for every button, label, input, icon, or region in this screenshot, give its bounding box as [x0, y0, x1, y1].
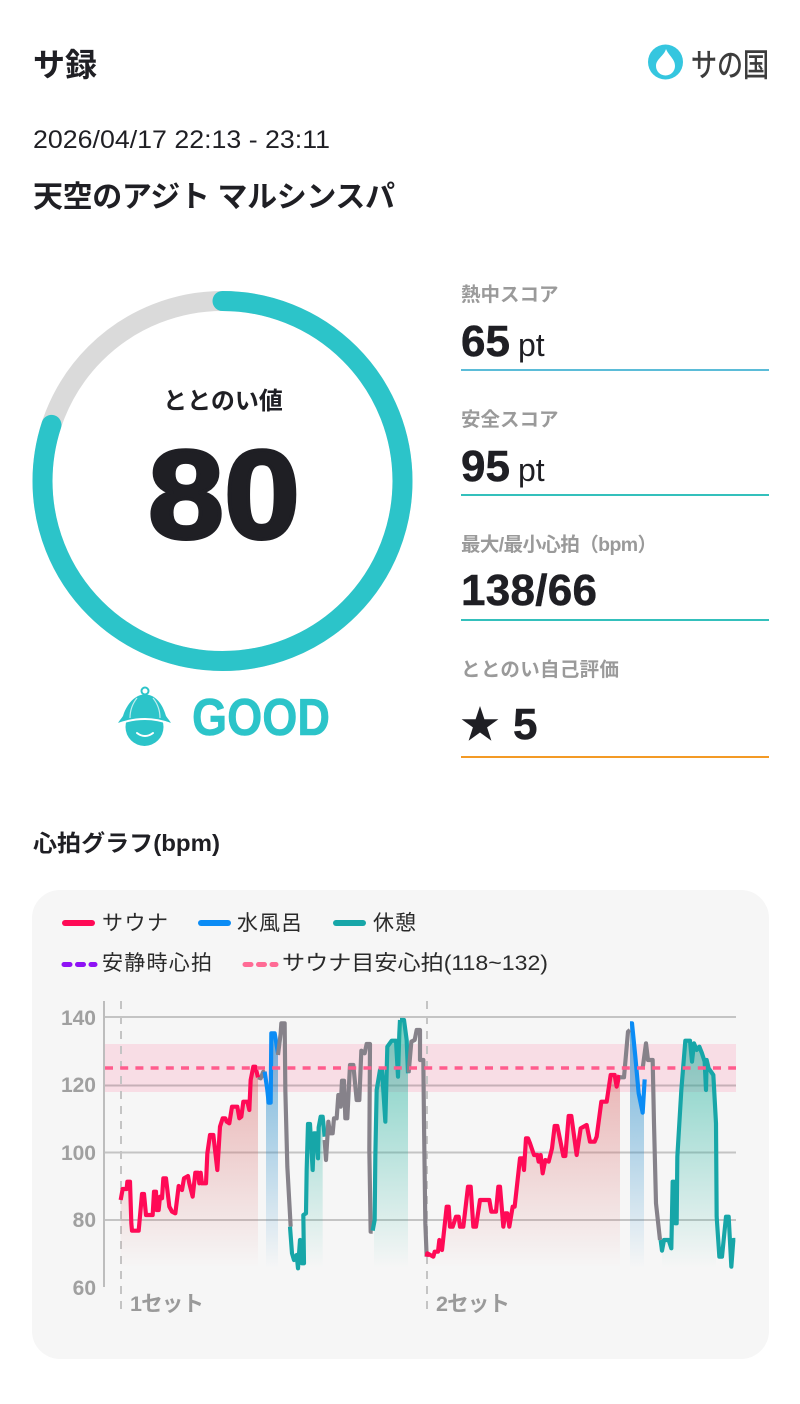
- legend: 休憩: [373, 912, 416, 935]
- stat: 安全スコア: 安全スコア: [461, 409, 559, 431]
- set labels: [130, 1292, 510, 1316]
- ring value: 80: [148, 424, 300, 565]
- stat: 最大/最小心拍: 138/66: [461, 566, 597, 615]
- stat: 熱中スコア: 熱中スコア: [461, 284, 559, 306]
- set labels: 2セット: [436, 1292, 510, 1316]
- stat: 最大/最小心拍: [461, 534, 769, 621]
- rating word: GOOD: [192, 689, 330, 747]
- legend: 水風呂: [237, 912, 302, 935]
- stat: ととのい自己評価: 5: [513, 700, 537, 749]
- target heart-rate dashed line: [105, 1066, 736, 1070]
- rating: GOOD: [118, 688, 330, 747]
- legend: サウナ: [102, 912, 168, 935]
- stat: 熱中スコア: 65: [461, 317, 510, 366]
- facility name: 天空のアジト マルシンスパ: [33, 181, 395, 214]
- y axis labels: 140: [61, 1007, 96, 1030]
- line chart: set 1: [121, 1020, 400, 1270]
- chart heading: 心拍グラフ(bpm): [33, 830, 220, 856]
- icon: sauna hat face: [118, 688, 171, 746]
- grid and axes: [103, 1001, 736, 1312]
- title: サ録: [33, 47, 97, 83]
- stat: 安全スコア: 95: [461, 442, 510, 491]
- panel: heart rate chart: [32, 890, 769, 1359]
- stat: ととのい自己評価: ととのい自己評価: [461, 659, 619, 681]
- line chart: set 2: [400, 1020, 735, 1270]
- legend: 安静時心拍: [102, 952, 212, 975]
- icon: water drop: [648, 44, 683, 80]
- stat: 熱中スコア: [461, 284, 769, 371]
- ring label: ととのい値: [163, 388, 283, 415]
- date and time: 2026/04/17 22:13 - 23:11: [33, 126, 330, 154]
- stat: 安全スコア: [461, 409, 769, 496]
- y axis labels: 100: [61, 1142, 96, 1165]
- y axis labels: [61, 1007, 96, 1300]
- stat: ととのい自己評価: [461, 659, 769, 758]
- y axis labels: 80: [73, 1209, 96, 1232]
- score ring: [42, 301, 402, 661]
- set labels: 1セット: [130, 1292, 204, 1316]
- logo wordmark: サの国: [691, 47, 769, 83]
- stat: 最大/最小心拍: 最大/最小心拍（bpm）: [461, 534, 657, 556]
- stat: 安全スコア: pt: [518, 452, 545, 488]
- target heart-rate band: [105, 1044, 736, 1092]
- stat: 熱中スコア: pt: [518, 327, 545, 363]
- legend: サウナ目安心拍(118~132): [282, 952, 548, 975]
- y axis labels: 60: [73, 1277, 96, 1300]
- icon: star: [462, 706, 498, 741]
- logo: サの国: [648, 44, 769, 83]
- y axis labels: 120: [61, 1074, 96, 1097]
- legend: [62, 912, 548, 975]
